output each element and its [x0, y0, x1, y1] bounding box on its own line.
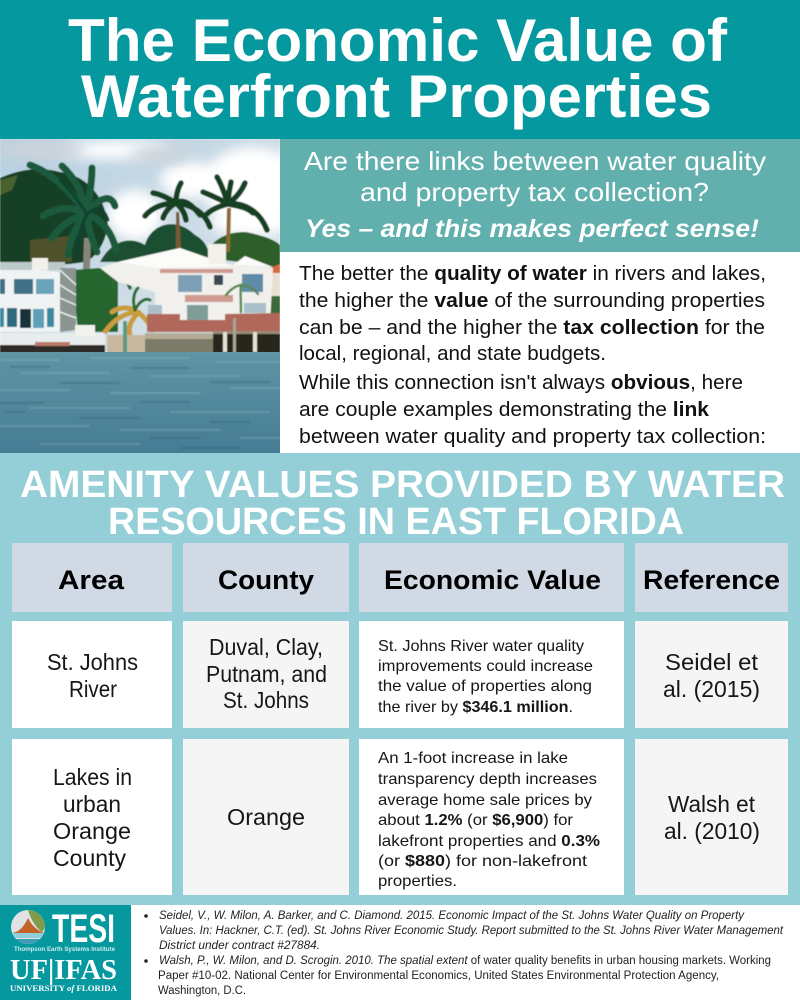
table row: St. Johns River: al. (2015)	[663, 676, 760, 702]
table row: Lakes in urban Orange County	[12, 739, 788, 895]
table row: St. Johns River: St. Johns	[47, 649, 138, 675]
table row: St. Johns River: improvements could increase	[378, 658, 593, 675]
palm, center	[176, 212, 181, 248]
panel: question: Yes – and this makes perfect sense!	[305, 215, 759, 243]
footer: logo panel: TESI	[52, 907, 115, 951]
deck	[147, 313, 280, 332]
title banner: Waterfront Properties	[81, 63, 712, 130]
panel: intro text: can be – and the higher the tax collection for the	[299, 317, 765, 339]
footer: references	[131, 905, 800, 1000]
footer: logo panel	[0, 905, 131, 1000]
footer: logo panel: UNIVERSITY of FLORIDA	[10, 984, 117, 993]
table row: St. Johns River: the river by $346.1 million.	[378, 699, 573, 716]
table row: St. Johns River: Putnam, and	[206, 661, 327, 687]
reference: Walsh et al. 2010: Paper #10-02. National Center for Environmental Economics, United States Environmental Protection Agency,	[158, 970, 719, 982]
big palm	[82, 237, 92, 270]
reference: Seidel et al. 2015: Seidel, V., W. Milon, A. Barker, and C. Diamond. 2015. Economic Impact of the St. Johns Water Quality on Property	[159, 910, 745, 922]
table row: Lakes in urban Orange County: Orange	[53, 818, 131, 844]
panel: intro text: are couple examples demonstrating the link	[299, 399, 710, 421]
reference: Seidel et al. 2015	[144, 910, 784, 952]
table row: Lakes in urban Orange County: (or $880 ) for non-lakefront	[378, 853, 588, 870]
footer: logo panel: Thompson Earth Systems Institute	[14, 946, 115, 953]
table header row	[12, 543, 788, 612]
main house	[100, 248, 273, 325]
docks and seawall	[0, 333, 105, 345]
table row: St. Johns River	[12, 621, 788, 728]
panel: intro text: local, regional, and state budgets.	[299, 343, 606, 365]
background palms and hedge	[100, 224, 280, 268]
table row: Lakes in urban Orange County: urban	[63, 791, 121, 817]
small palm on right of house	[226, 285, 258, 312]
table row: Lakes in urban Orange County: about 1.2% (or $6,900) for	[378, 812, 574, 829]
panel: intro text: The better the quality of water in rivers and lakes,	[299, 263, 766, 285]
left house	[0, 270, 60, 332]
reference: Walsh et al. 2010: Washington, D.C.	[158, 985, 246, 997]
orange fronds	[105, 308, 152, 335]
footer: logo panel: UF|IFAS	[10, 955, 117, 986]
table row: St. Johns River: the value of properties along	[378, 678, 592, 695]
panel: question: and property tax collection?	[360, 177, 709, 207]
table row: Lakes in urban Orange County: properties.	[378, 873, 457, 890]
table header row: Economic Value	[384, 565, 601, 595]
table row: Lakes in urban Orange County: Lakes in	[53, 764, 132, 790]
table header row: Area	[58, 565, 125, 595]
table row: Lakes in urban Orange County: average home sale prices by	[378, 792, 592, 809]
table row: Lakes in urban Orange County: transparency depth increases	[378, 771, 597, 788]
left dark tree mass	[0, 169, 108, 268]
table row: Lakes in urban Orange County: lakefront properties and 0.3%	[378, 833, 600, 850]
panel: amenity values table section	[0, 453, 800, 905]
table row: St. Johns River: St. Johns River water quality	[378, 638, 584, 655]
table row: Lakes in urban Orange County: County	[53, 845, 127, 871]
reference: Walsh et al. 2010: Walsh, P., W. Milon, and D. Scrogin. 2010. The spatial extent of water quality benefits in urban housing markets. Working	[159, 955, 771, 967]
table row: Lakes in urban Orange County: al. (2010)	[664, 818, 760, 844]
hedge and trees left of house	[72, 268, 118, 332]
section heading: AMENITY VALUES PROVIDED BY WATER	[20, 464, 785, 506]
section heading	[20, 464, 785, 543]
palm, right	[226, 208, 231, 252]
reference: Walsh et al. 2010	[144, 955, 771, 997]
reference: Seidel et al. 2015: Values. In: Hackner, C.T. (ed). St. Johns River Economic Study. Report submitted to the St. Johns River Water Management	[159, 925, 784, 937]
table row: Lakes in urban Orange County: Walsh et	[668, 791, 756, 817]
title banner: The Economic Value of	[68, 7, 728, 74]
panel: intro text	[280, 252, 800, 453]
table row: St. Johns River: Duval, Clay,	[209, 634, 323, 660]
table header row: Reference	[643, 565, 780, 595]
table header row: County	[218, 565, 314, 595]
panel: intro text: the higher the value of the surrounding properties	[299, 290, 765, 312]
title banner	[0, 0, 800, 139]
panel: question: Are there links between water quality	[304, 146, 766, 176]
table row: Lakes in urban Orange County: Orange	[227, 804, 305, 830]
table row: Lakes in urban Orange County: An 1-foot increase in lake	[378, 750, 568, 767]
panel: intro text: between water quality and property tax collection:	[299, 426, 766, 448]
section heading: RESOURCES IN EAST FLORIDA	[108, 501, 684, 543]
icon: TESI emblem	[11, 910, 45, 944]
table row: St. Johns River: St. Johns	[223, 687, 309, 713]
table row: St. Johns River: River	[69, 676, 117, 702]
table row: St. Johns River: Seidel et	[665, 649, 759, 675]
panel: question	[280, 139, 800, 252]
reference: Seidel et al. 2015: District under contract #27884.	[159, 940, 320, 952]
photo: waterfront houses with palm trees	[0, 139, 302, 453]
right neighbours	[272, 272, 280, 296]
panel: intro text: While this connection isn't always obvious, here	[299, 372, 743, 394]
